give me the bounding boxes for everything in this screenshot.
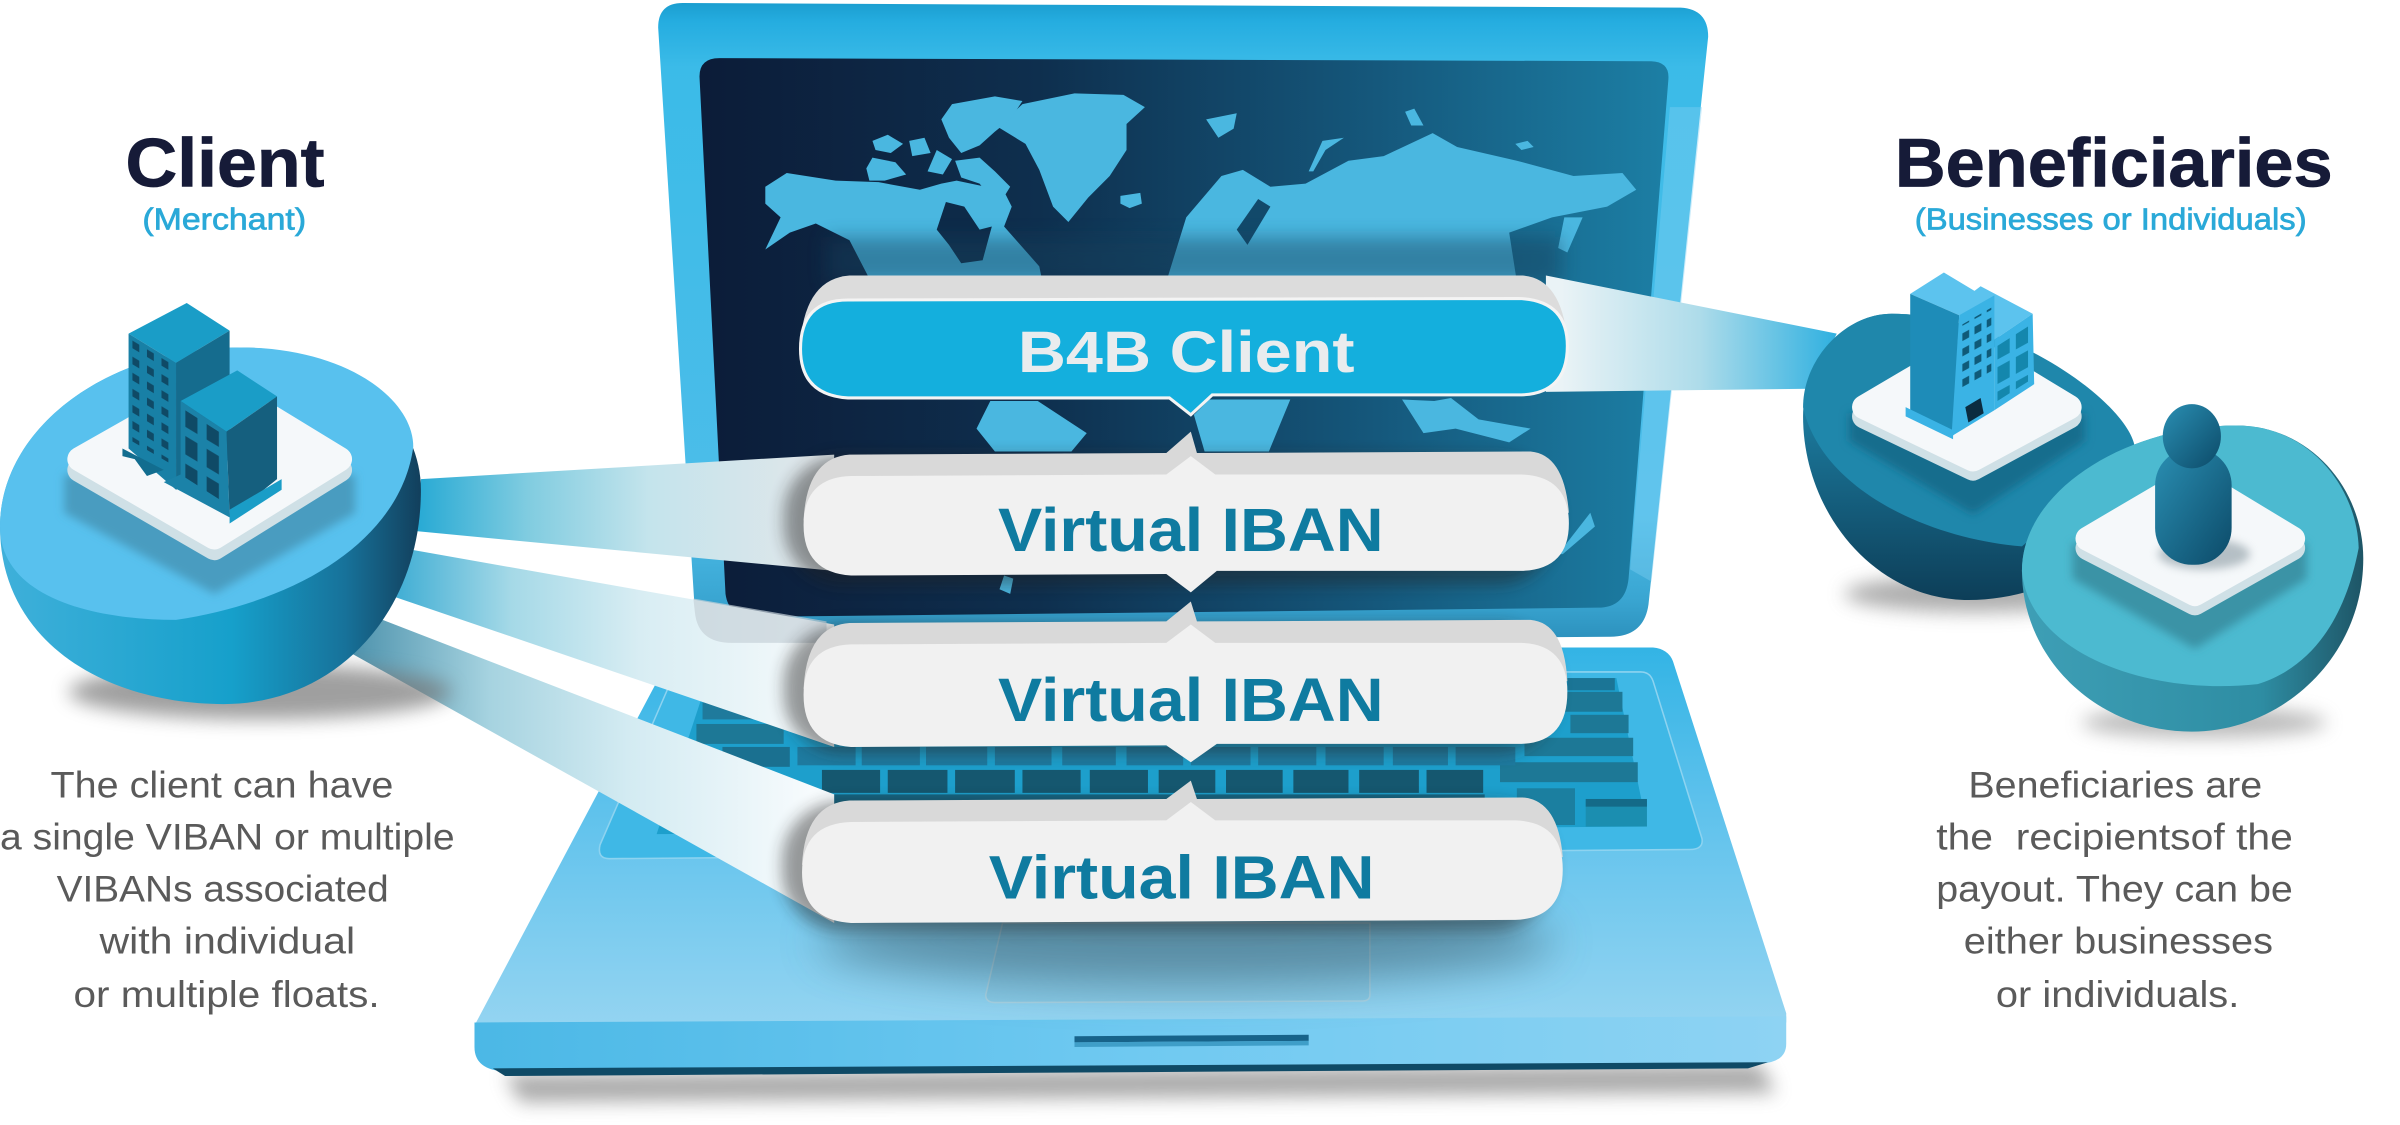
Hudson Bay bbox=[937, 202, 992, 263]
client sphere bbox=[0, 347, 421, 704]
subtitle: Businesses or Individuals: (Businesses or Individuals) bbox=[1915, 203, 2307, 237]
beneficiaries description: or individuals. bbox=[1996, 974, 2239, 1015]
beneficiaries description: the recipientsof the bbox=[1936, 816, 2293, 857]
pill: B4B Client bbox=[801, 276, 1567, 415]
client description bbox=[0, 764, 455, 1015]
Svalbard bbox=[1206, 113, 1237, 138]
icon: client buildings bbox=[122, 303, 282, 523]
front notch bbox=[1074, 1035, 1309, 1047]
laptop base bbox=[474, 647, 1786, 1026]
title: Beneficiaries: Beneficiaries bbox=[1895, 125, 2333, 202]
beams from client to Virtual IBANs bbox=[349, 455, 834, 923]
pill: B4B Client: B4B Client bbox=[1018, 320, 1355, 385]
trackpad bbox=[986, 923, 1370, 1003]
client description: or multiple floats. bbox=[73, 974, 380, 1015]
laptop lid bbox=[658, 3, 1708, 643]
client sphere top face bbox=[0, 347, 413, 620]
laptop underside line bbox=[493, 1062, 1768, 1076]
Iceland bbox=[1120, 193, 1142, 208]
client shadow bbox=[69, 664, 452, 719]
New Zealand bbox=[1558, 513, 1595, 554]
Kamchatka bbox=[1558, 217, 1583, 253]
lid right highlight bbox=[1630, 107, 1702, 582]
beam to beneficiaries bbox=[1546, 276, 1837, 392]
Eurasia bbox=[1166, 133, 1636, 282]
business plate shadow bbox=[1849, 413, 2085, 514]
glass panel over lid corner bbox=[693, 598, 827, 643]
keyboard deck bbox=[599, 672, 1702, 859]
beneficiaries description: Beneficiaries are bbox=[1968, 764, 2262, 805]
Ellesmere bbox=[941, 96, 1022, 153]
individual plate bbox=[2088, 478, 2293, 603]
keyboard bbox=[657, 678, 1647, 834]
Africa fragment bbox=[1194, 399, 1290, 452]
plate shadow bbox=[64, 474, 355, 594]
pill cast shadow on base bbox=[819, 898, 1554, 984]
pill: Virtual IBAN 2: Virtual IBAN bbox=[998, 666, 1384, 734]
beneficiaries description: either businesses bbox=[1964, 921, 2273, 962]
laptop ground shadow bbox=[505, 1064, 1776, 1102]
Novaya Zemlya bbox=[1309, 138, 1344, 171]
business sphere bbox=[1803, 314, 2135, 600]
icon: business building bbox=[1906, 272, 2034, 439]
pill: Virtual IBAN 1: Virtual IBAN bbox=[998, 496, 1384, 564]
business plate bbox=[1864, 346, 2069, 468]
Greenland bbox=[998, 93, 1145, 222]
subtitle: Merchant: (Merchant) bbox=[142, 203, 306, 237]
Severnaya bbox=[1405, 109, 1423, 126]
individual sphere top face bbox=[2022, 426, 2359, 686]
business sphere top face bbox=[1803, 314, 2135, 546]
South America fragment bbox=[977, 401, 1087, 452]
beneficiaries description: payout. They can be bbox=[1936, 869, 2293, 910]
client description: a single VIBAN or multiple bbox=[0, 816, 455, 857]
pill: Virtual IBAN 3: Virtual IBAN bbox=[989, 843, 1374, 911]
beneficiaries description bbox=[1936, 764, 2293, 1015]
client description: VIBANs associated bbox=[57, 869, 389, 910]
laptop screen bbox=[699, 58, 1668, 617]
Europe gulf bbox=[1237, 199, 1270, 245]
individual shadow bbox=[2082, 707, 2327, 738]
individual plate shadow bbox=[2072, 543, 2307, 649]
SE Asia fragment bbox=[1402, 398, 1531, 442]
pill: Virtual IBAN 2 bbox=[784, 602, 1567, 762]
Arctic islands bbox=[866, 158, 906, 181]
laptop front lip bbox=[474, 1016, 1786, 1071]
screen shadow on map bbox=[827, 237, 1561, 283]
North America bbox=[765, 173, 1042, 282]
title: Client: Client bbox=[126, 125, 325, 202]
client description: with individual bbox=[98, 921, 355, 962]
beneficiaries shadow bbox=[1844, 576, 2105, 612]
icon: person bbox=[2155, 404, 2250, 569]
panel: beneficiaries bbox=[1803, 125, 2363, 1015]
client description: The client can have bbox=[51, 764, 393, 805]
panel: client bbox=[0, 125, 455, 1015]
panel: laptop bbox=[474, 3, 1786, 1102]
world map bbox=[765, 93, 1636, 594]
pill: Virtual IBAN 3 bbox=[782, 781, 1563, 931]
individual sphere bbox=[2022, 426, 2363, 732]
panel: IBAN pills bbox=[782, 276, 1569, 931]
client plate bbox=[80, 383, 340, 548]
pill: Virtual IBAN 1 bbox=[784, 432, 1569, 592]
